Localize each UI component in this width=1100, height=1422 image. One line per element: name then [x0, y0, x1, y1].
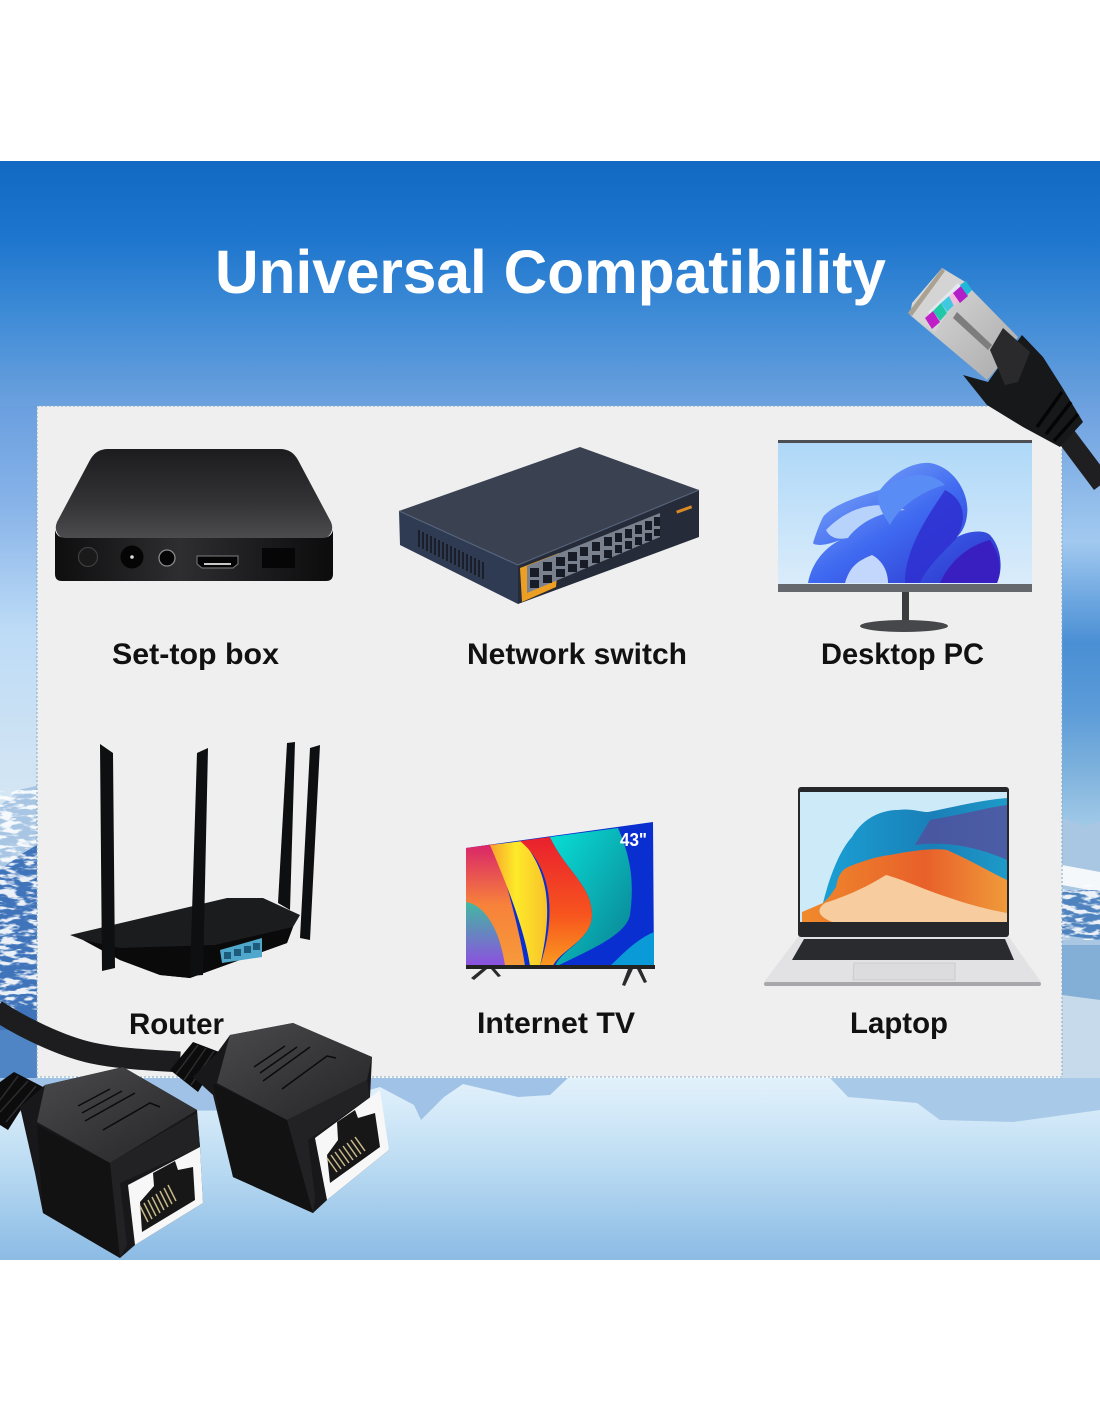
ports [527, 513, 660, 593]
title: Universal Compatibility [215, 238, 886, 306]
icon: laptop [764, 787, 1041, 986]
label: internet TV: Internet TV [477, 1007, 635, 1040]
label: laptop: Laptop [850, 1007, 948, 1040]
left connector [0, 1067, 203, 1258]
water [0, 1078, 1100, 1260]
vent [419, 530, 483, 579]
ice reflection left [0, 1078, 568, 1120]
label: desktop PC: Desktop PC [821, 638, 984, 671]
icon: network switch [399, 447, 699, 604]
background: sky and glacier [0, 161, 1100, 1260]
label: router: Router [129, 1008, 224, 1041]
panel: device grid [37, 406, 1062, 1077]
mountains left [0, 786, 37, 1080]
icon: RJ45 female connector cables, bottom left [0, 1010, 389, 1258]
icon: router [70, 742, 320, 978]
ice reflection right [830, 1078, 1100, 1122]
mountains right [1062, 818, 1100, 1080]
label: network switch: Network switch [467, 638, 687, 671]
icon: RJ45 plug and cable, top right [908, 268, 1100, 484]
label: set-top box: Set-top box [112, 638, 279, 671]
icon: desktop monitor [778, 440, 1032, 632]
icon: internet TV [466, 822, 655, 986]
icon: internet TV: 43" [620, 830, 647, 850]
right connector [170, 1023, 389, 1213]
icon: set-top box [55, 449, 333, 581]
